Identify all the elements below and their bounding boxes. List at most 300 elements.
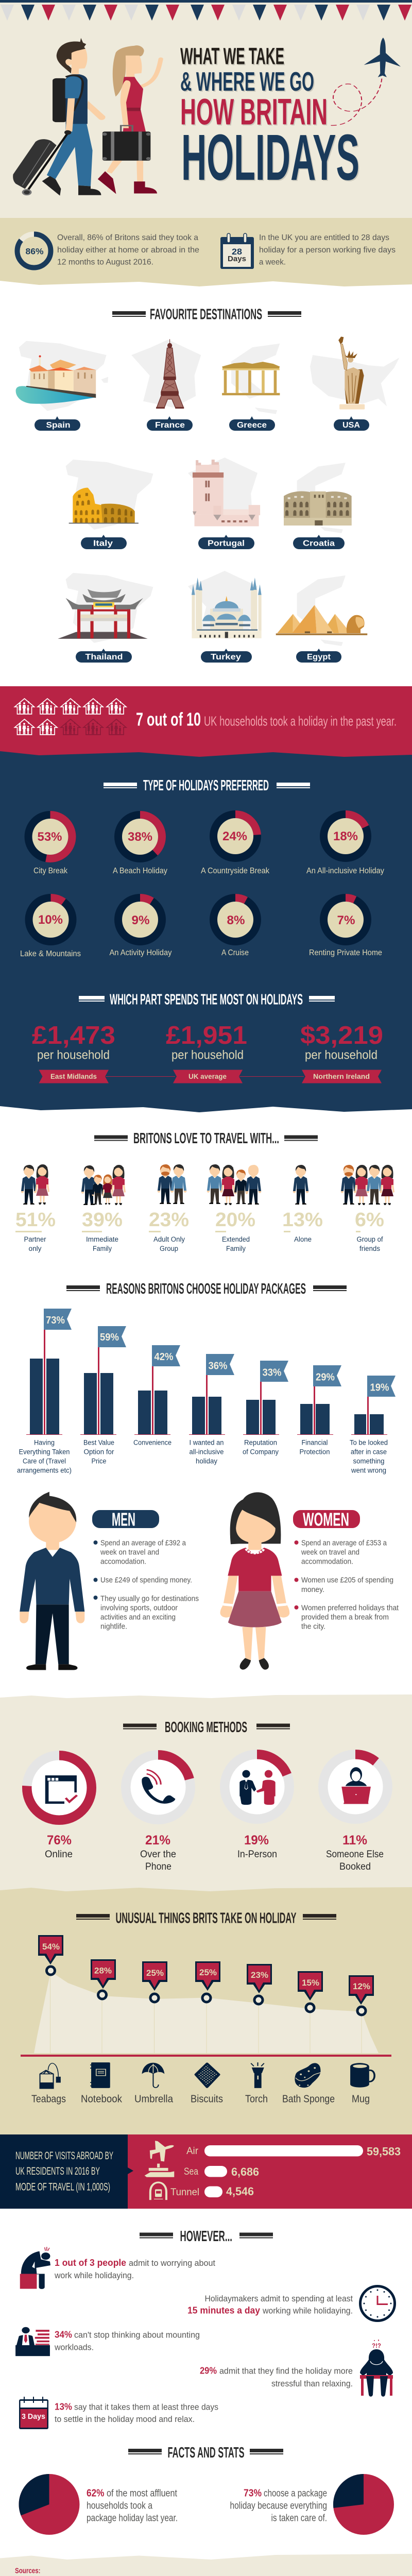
icon: plane with dashed flight path <box>329 38 401 125</box>
pin: biscuits 25% <box>195 1961 220 2002</box>
bar: convenience 42%: Convenience <box>133 1438 171 1447</box>
method: over the phone 21%: 21% <box>145 1833 170 1848</box>
heading: favourite destinations <box>112 306 301 323</box>
chart: An Activity Holiday 9% <box>109 894 172 957</box>
heading: unusual things <box>76 1910 336 1927</box>
text: three days to settle: 13% <box>55 2402 72 2412</box>
destination: Egypt <box>276 575 367 663</box>
icon: calendar 28 days: Days <box>228 255 246 263</box>
chart: Renting Private Home 7%: Renting Private Home <box>309 948 382 957</box>
bullet list: men: Spend an average of £392 a <box>100 1539 186 1548</box>
chart: A Countryside Break 24%: A Countryside Break <box>201 867 269 875</box>
label: Turkey: Turkey <box>211 653 241 662</box>
label: France: France <box>155 421 185 430</box>
bar: looked after 19%: something <box>353 1457 384 1465</box>
chart: City Break 53%: City Break <box>33 867 67 875</box>
chart: An Activity Holiday 9%: An Activity Holiday <box>109 948 172 957</box>
icon: person at laptop <box>341 1767 371 1804</box>
method: someone else booked 11%: Someone Else <box>326 1849 384 1860</box>
group: partner only 51%: only <box>29 1245 42 1252</box>
text: holiday statistic <box>57 233 199 267</box>
group: extended family 20%: Family <box>226 1245 246 1252</box>
panel: men <box>20 1492 199 1670</box>
label: Greece <box>229 416 275 431</box>
item: mug: Mug <box>352 2094 370 2105</box>
bar: all-inclusive 36%: I wanted an <box>190 1438 224 1447</box>
icon: calendar 3 days: 3 Days <box>22 2412 45 2421</box>
heading: Britons love to travel with: BRITONS LOVE TO TRAVEL WITH... <box>133 1130 279 1147</box>
icon: browser window <box>45 1775 77 1804</box>
stat: Northern Ireland <box>300 1022 383 1083</box>
pin: teabags 54%: 54% <box>42 1942 60 1952</box>
text: worrying about work: 1 out of 3 people <box>55 2258 126 2268</box>
text: holiday statistic: holiday either at home or abroad in the <box>57 246 199 255</box>
icon: stressed person on stool: ?!? <box>372 2342 381 2349</box>
bar: air: 59,583 <box>367 2145 401 2158</box>
pin: torch 23%: 23% <box>251 1970 268 1980</box>
bullet list: women: provided them a break from <box>301 1614 389 1622</box>
method: someone else booked 11%: 11% <box>342 1833 367 1848</box>
bar: reputation 33% <box>243 1361 288 1456</box>
text: three days to settle: say that it takes them at least three days <box>74 2402 218 2412</box>
bar: financial protection 29%: 29% <box>316 1371 335 1383</box>
heading: type of holidays preferred: TYPE OF HOLIDAYS PREFERRED <box>143 777 269 794</box>
chart: A Beach Holiday 38%: 38% <box>128 830 152 844</box>
item: umbrella: Umbrella <box>134 2094 174 2105</box>
bar: best value 59%: Best Value <box>83 1438 114 1447</box>
text: package holiday reasons: choose a package <box>264 2488 327 2499</box>
chart: area chart with map pins <box>21 1935 391 2057</box>
destination: Italy <box>66 460 153 549</box>
chart: Renting Private Home 7% <box>309 894 382 957</box>
label: Spain <box>35 416 80 431</box>
panel: Britons love to travel with <box>15 1130 394 1252</box>
destination: Thailand <box>58 573 153 663</box>
bullet list: women: week on travel and <box>301 1549 359 1557</box>
text: worrying about work: work while holidaying. <box>54 2270 134 2280</box>
panel: hero header <box>0 0 412 222</box>
pin: mug 12%: 12% <box>353 1981 370 1991</box>
bar: sea <box>145 2164 259 2178</box>
text: chart title <box>15 2150 113 2193</box>
text: 15 minutes a day: Holidaymakers admit to spending at least <box>205 2294 353 2303</box>
pin: mug 12% <box>349 1975 374 2015</box>
stat: UK average: UK average <box>188 1072 227 1080</box>
item: teabags: Teabags <box>31 2094 66 2105</box>
bar: air <box>150 2141 401 2161</box>
method: in-person 19%: 19% <box>244 1833 269 1848</box>
bar: having everything taken care of 73%: Care of (Travel <box>23 1457 66 1465</box>
chart: A Beach Holiday 38%: A Beach Holiday <box>113 867 167 875</box>
stat: East Midlands: per household <box>37 1048 110 1062</box>
text: chart title: MODE OF TRAVEL (IN 1,000S) <box>15 2181 110 2193</box>
panel: holiday types and spending <box>0 751 412 1112</box>
pin: torch 23% <box>247 1964 272 2004</box>
icon: handshake <box>239 1770 276 1805</box>
text: affluent households <box>87 2487 178 2523</box>
text: mounting workloads: workloads. <box>54 2342 94 2352</box>
panel: reasons for package holidays <box>17 1281 396 1475</box>
label: Egypt <box>296 649 341 663</box>
bullet list: women: accommodation. <box>301 1558 353 1566</box>
item: teabags <box>31 2063 66 2105</box>
bar: looked after 19%: after in case <box>351 1448 387 1456</box>
group: extended family 20%: 20% <box>215 1209 255 1231</box>
stat: Northern Ireland: Northern Ireland <box>313 1072 370 1080</box>
chart: A Beach Holiday 38% <box>113 811 167 875</box>
group: group of friends 6% <box>341 1165 394 1252</box>
label: Greece: Greece <box>237 421 267 430</box>
icon: calendar 28 days: 28 <box>232 247 242 257</box>
destination: Portugal <box>188 457 260 549</box>
chart: An All-inclusive Holiday 18%: An All-inclusive Holiday <box>306 867 384 875</box>
heading: favourite destinations: FAVOURITE DESTINATIONS <box>150 306 262 323</box>
chart: An Activity Holiday 9%: 9% <box>132 913 149 927</box>
pin: bath sponge 15%: 15% <box>302 1978 319 1988</box>
text: holiday entitlement <box>259 233 396 267</box>
text: holiday entitlement: In the UK you are entitled to 28 days <box>259 233 389 242</box>
label: Turkey <box>201 649 252 663</box>
icon: clock <box>360 2286 394 2320</box>
bar: reputation 33%: Reputation <box>244 1438 277 1447</box>
bar: convenience 42%: 42% <box>154 1351 174 1363</box>
heading: which part spends the most <box>79 991 335 1008</box>
text: 15 minutes a day <box>187 2294 353 2315</box>
bar: reputation 33%: 33% <box>263 1367 282 1379</box>
chart: Lake and Mountains 10%: 10% <box>38 913 63 927</box>
chart: 86% ring <box>18 234 50 268</box>
pin: notebook 28%: 28% <box>94 1966 112 1975</box>
text: mounting workloads: 34% <box>55 2330 72 2340</box>
destination: Greece <box>222 344 280 431</box>
group: immediate family 39%: Immediate <box>86 1235 118 1243</box>
method: in-person 19%: In-Person <box>237 1849 277 1860</box>
bar: best value 59%: Option for <box>83 1448 114 1456</box>
text: package holiday reasons: holiday because everything <box>230 2501 327 2511</box>
chart: 86% ring: 86% <box>26 246 43 257</box>
bar: having everything taken care of 73% <box>17 1309 72 1475</box>
heading: booking methods: BOOKING METHODS <box>165 1719 247 1736</box>
heading: facts and stats <box>128 2445 283 2461</box>
text: 7 out of 10 households: 7 out of 10 <box>136 709 201 730</box>
group: immediate family 39%: Family <box>93 1245 112 1252</box>
item: mug <box>350 2063 374 2105</box>
stat: East Midlands: £1,473 <box>32 1022 115 1049</box>
panel: unusual things Brits take on holiday <box>0 1887 412 2134</box>
group: alone 13%: 13% <box>282 1209 323 1231</box>
text: package holiday reasons <box>230 2487 327 2523</box>
label: Thailand: Thailand <box>85 653 123 662</box>
pin: teabags 54% <box>38 1935 63 1975</box>
method: over the phone 21%: Phone <box>145 1861 171 1872</box>
bar: having everything taken care of 73%: arrangements etc) <box>17 1466 72 1475</box>
bar: having everything taken care of 73%: Everything Taken <box>19 1448 70 1456</box>
stat: UK average <box>166 1022 247 1083</box>
item: biscuits <box>191 2064 223 2105</box>
text: stressful holiday: admit that they find the holiday more <box>219 2366 353 2376</box>
text: 15 minutes a day: 15 minutes a day <box>187 2305 260 2315</box>
label: Spain: Spain <box>46 421 70 430</box>
group: partner only 51% <box>15 1164 56 1252</box>
text: mounting workloads <box>54 2330 200 2352</box>
bullet list: men: accomodation. <box>100 1558 146 1566</box>
text: stressful holiday: stressful than relaxing. <box>271 2379 353 2388</box>
group: partner only 51%: 51% <box>15 1209 56 1231</box>
label: women: WOMEN <box>303 1509 349 1530</box>
group: extended family 20% <box>207 1164 261 1252</box>
group: alone 13%: Alone <box>294 1235 312 1243</box>
heading: Britons love to travel with <box>94 1130 318 1147</box>
item: notebook: Notebook <box>81 2094 123 2105</box>
text: chart title: NUMBER OF VISITS ABROAD BY <box>15 2150 113 2162</box>
text: affluent households: of the most affluent <box>107 2488 178 2499</box>
illustration: male traveller with wheeled suitcase <box>13 38 105 196</box>
item: torch <box>245 2062 268 2105</box>
connector line between regions <box>106 1076 304 1077</box>
text: mounting workloads: can't stop thinking about mounting <box>74 2330 200 2340</box>
title <box>180 43 359 194</box>
label: Egypt: Egypt <box>307 653 331 662</box>
text: stressful holiday: 29% <box>200 2366 217 2376</box>
method: online 76%: Online <box>45 1849 73 1860</box>
chart: A Countryside Break 24% <box>201 810 269 875</box>
title: WHAT WE TAKE <box>180 43 284 69</box>
method: someone else booked 11%: Booked <box>339 1861 371 1872</box>
chart: A Cruise 8% <box>210 894 261 957</box>
text: chart title: UK RESIDENTS IN 2016 BY <box>15 2165 100 2177</box>
panel: 7 out of 10 households <box>0 686 412 758</box>
bar: financial protection 29%: Financial <box>302 1438 328 1447</box>
text: three days to settle: to settle in the holiday mood and relax. <box>55 2414 195 2424</box>
panel: key facts band <box>0 218 412 286</box>
stat: Northern Ireland: $3,219 <box>300 1022 383 1049</box>
heading: facts and stats: FACTS AND STATS <box>168 2445 244 2461</box>
bar: all-inclusive 36% <box>189 1354 234 1465</box>
item: torch: Torch <box>245 2094 268 2105</box>
stat: UK average: per household <box>171 1048 244 1062</box>
bullet list: women: the city. <box>301 1623 325 1631</box>
chart: City Break 53%: 53% <box>37 830 62 844</box>
text: sources: Sources: <box>15 2567 40 2575</box>
chart: pie 62% <box>19 2474 79 2535</box>
panel: however <box>15 2228 394 2429</box>
group: extended family 20%: Extended <box>222 1235 250 1243</box>
illustration: female traveller with briefcase <box>98 45 161 194</box>
item: notebook <box>81 2062 123 2105</box>
bullet list: women: Women use £205 of spending <box>301 1577 393 1585</box>
group: group of friends 6%: Group of <box>356 1235 383 1243</box>
bar: looked after 19% <box>350 1376 396 1475</box>
bullet list: men: Use £249 of spending money. <box>100 1577 192 1585</box>
stat: Northern Ireland: per household <box>305 1048 377 1062</box>
method: online 76% <box>27 1755 92 1860</box>
chart: Lake and Mountains 10%: Lake & Mountains <box>20 950 81 958</box>
text: three days to settle <box>55 2402 218 2424</box>
bar: sea: 6,686 <box>231 2165 259 2178</box>
bar: best value 59%: Price <box>92 1457 106 1465</box>
label: Croatia: Croatia <box>303 539 335 548</box>
group: adult only group 23%: Adult Only <box>153 1235 185 1243</box>
destination: USA <box>310 336 400 431</box>
illustration: woman <box>220 1492 289 1670</box>
icon: calendar 3 days <box>19 2397 48 2429</box>
item: umbrella <box>134 2063 174 2105</box>
bar: sea: Sea <box>184 2166 198 2177</box>
method: over the phone 21%: Over the <box>140 1849 176 1860</box>
group: adult only group 23% <box>149 1164 189 1252</box>
heading: type of holidays preferred <box>104 777 310 794</box>
bar: financial protection 29% <box>297 1365 341 1456</box>
panel: visits abroad by mode of travel <box>0 2134 412 2209</box>
text: package holiday reasons: is taken care of. <box>271 2513 327 2523</box>
title: & WHERE WE GO <box>180 67 314 97</box>
destination: Croatia <box>284 463 352 549</box>
text: holiday entitlement: holiday for a person working five days <box>259 246 396 255</box>
group: alone 13% <box>282 1165 323 1243</box>
bullet list: men <box>94 1539 199 1631</box>
bullet list: men: They usually go for destinations <box>100 1595 199 1603</box>
bar: having everything taken care of 73%: 73% <box>46 1315 65 1326</box>
label: Portugal: Portugal <box>208 539 245 548</box>
bar: air: Air <box>186 2146 199 2157</box>
label: Croatia <box>293 535 345 549</box>
chart: An All-inclusive Holiday 18% <box>306 810 384 875</box>
label: Thailand <box>76 649 132 663</box>
bullet list: men: nightlife. <box>100 1623 127 1631</box>
label: men: MEN <box>112 1509 135 1530</box>
chart: A Cruise 8%: 8% <box>227 913 245 927</box>
method: online 76%: 76% <box>47 1833 72 1848</box>
bar: tunnel <box>150 2182 254 2200</box>
icon: telephone handset <box>142 1770 175 1804</box>
panel: footer with sources <box>0 2554 412 2576</box>
text: 7 out of 10 households <box>136 709 397 730</box>
panel: booking methods <box>0 1694 412 1896</box>
pin: bath sponge 15% <box>298 1971 323 2012</box>
pin: umbrella 25% <box>142 1961 167 2002</box>
icon grid: households <box>14 699 126 735</box>
label: Italy: Italy <box>93 539 113 548</box>
icon: person with workload <box>15 2327 50 2356</box>
bar: tunnel: Tunnel <box>170 2187 199 2198</box>
bar: best value 59% <box>80 1326 126 1465</box>
group: partner only 51%: Partner <box>24 1235 46 1243</box>
group: adult only group 23%: 23% <box>149 1209 189 1231</box>
bullet list: women: money. <box>301 1586 324 1594</box>
text: stressful holiday <box>200 2366 353 2388</box>
group: group of friends 6%: 6% <box>355 1209 384 1231</box>
chart: City Break 53% <box>25 811 76 875</box>
stat: East Midlands: East Midlands <box>50 1072 97 1080</box>
chart: Lake and Mountains 10% <box>20 894 81 958</box>
chart: A Cruise 8%: A Cruise <box>221 948 249 957</box>
label: USA <box>334 416 369 431</box>
pin: biscuits 25%: 25% <box>199 1968 217 1977</box>
text: holiday entitlement: a week. <box>259 258 286 267</box>
illustration: man <box>20 1492 84 1670</box>
bar: tunnel: 4,546 <box>226 2185 254 2198</box>
bullet list: men: week on travel and <box>100 1549 159 1557</box>
bullet list: men: activities and an exciting <box>100 1614 176 1622</box>
method: in-person 19% <box>225 1754 289 1860</box>
bar: all-inclusive 36%: all-inclusive <box>190 1448 224 1456</box>
panel: favourite destinations <box>16 306 400 663</box>
heading: however: HOWEVER... <box>180 2228 232 2245</box>
text: worrying about work <box>54 2258 215 2280</box>
bar: best value 59%: 59% <box>100 1332 119 1343</box>
group: group of friends 6%: friends <box>359 1245 380 1252</box>
text: affluent households: 62% <box>87 2487 105 2499</box>
bar: looked after 19%: went wrong <box>351 1466 386 1475</box>
bar: looked after 19%: 19% <box>370 1382 389 1393</box>
label: men <box>92 1509 159 1530</box>
pin: umbrella 25%: 25% <box>146 1968 164 1978</box>
text: holiday statistic: 12 months to August 2016. <box>57 258 153 267</box>
bullet list: men: involving sports, outdoor <box>100 1604 178 1613</box>
bunting <box>1 5 411 21</box>
chart: Renting Private Home 7%: 7% <box>337 913 355 927</box>
bar: convenience 42% <box>133 1345 180 1447</box>
destination: Turkey <box>188 571 262 663</box>
icon: worried man <box>20 2247 50 2289</box>
icon: stressed person on stool <box>360 2340 393 2397</box>
label: USA: USA <box>342 421 360 430</box>
text: affluent households: package holiday last year. <box>87 2513 178 2523</box>
bar: reputation 33%: of Company <box>243 1448 279 1456</box>
item: biscuits: Biscuits <box>191 2094 223 2105</box>
bar: looked after 19%: To be looked <box>350 1438 388 1447</box>
heading: reasons Britons choose holiday packages <box>66 1281 347 1297</box>
method: over the phone 21% <box>126 1755 191 1872</box>
text: 15 minutes a day: working while holidaying. <box>262 2306 353 2315</box>
bar: all-inclusive 36%: 36% <box>208 1360 228 1371</box>
text: holiday statistic: Overall, 86% of Britons said they took a <box>57 233 198 242</box>
panel: facts and stats <box>19 2445 394 2535</box>
bar: all-inclusive 36%: holiday <box>196 1457 217 1465</box>
method: someone else booked 11% <box>323 1754 388 1872</box>
label: Portugal <box>198 535 254 549</box>
group: immediate family 39% <box>81 1165 126 1252</box>
bullet list: women: Spend an average of £353 a <box>301 1539 387 1548</box>
chart: An All-inclusive Holiday 18%: 18% <box>333 829 358 843</box>
label: Italy <box>81 535 127 549</box>
text: worrying about work: admit to worrying about <box>129 2258 215 2268</box>
bullet list: women <box>295 1539 399 1631</box>
bar: financial protection 29%: Protection <box>300 1448 330 1456</box>
item: bath sponge <box>282 2063 335 2105</box>
panel: women <box>220 1492 399 1670</box>
stat: East Midlands <box>32 1022 115 1083</box>
group: immediate family 39%: 39% <box>82 1209 123 1231</box>
item: bath sponge: Bath Sponge <box>282 2094 335 2105</box>
heading: booking methods <box>123 1719 290 1736</box>
pin: notebook 28% <box>91 1959 116 1999</box>
stat: UK average: £1,951 <box>166 1022 247 1049</box>
heading: however <box>140 2228 273 2245</box>
bullet list: women: Women preferred holidays that <box>301 1604 399 1613</box>
chart: pie 73% <box>333 2474 394 2535</box>
label: women <box>293 1509 360 1530</box>
group: adult only group 23%: Group <box>160 1245 178 1252</box>
destination: Spain <box>16 341 108 431</box>
destination: France <box>131 339 201 431</box>
chart: A Countryside Break 24%: 24% <box>222 829 247 843</box>
bar: having everything taken care of 73%: Having <box>34 1438 55 1447</box>
text: affluent households: households took a <box>87 2501 152 2511</box>
icon: calendar 28 days <box>220 233 254 269</box>
label: France <box>147 416 193 431</box>
text: package holiday reasons: 73% <box>244 2487 262 2499</box>
